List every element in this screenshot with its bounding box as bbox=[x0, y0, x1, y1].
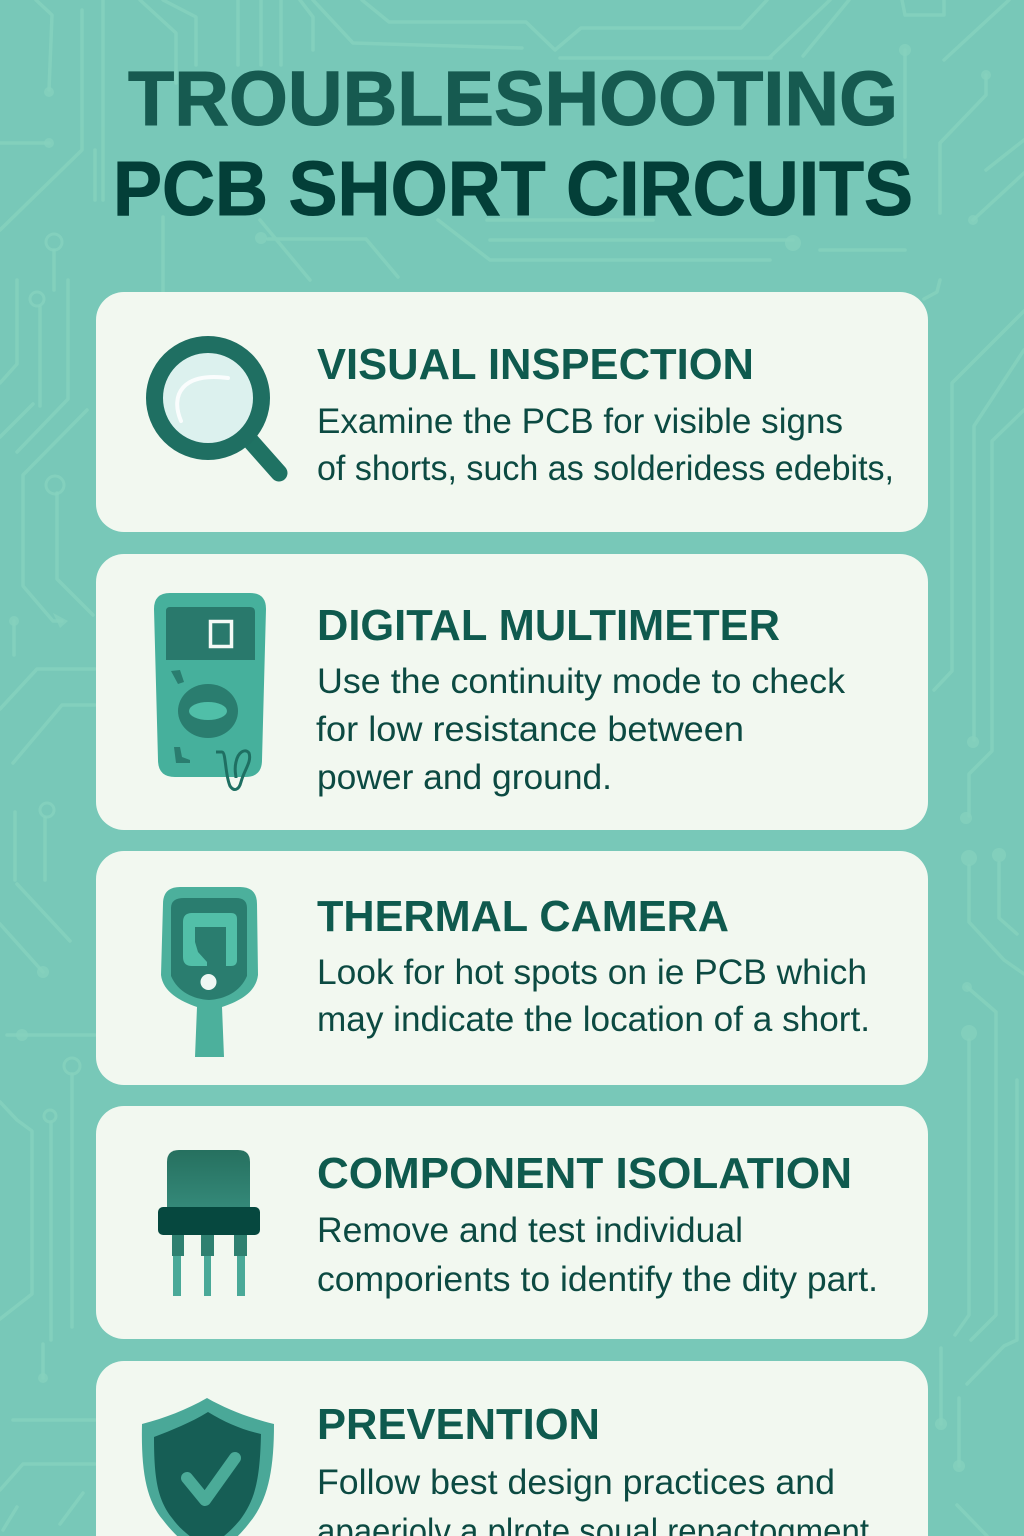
text: visual inspection description: Examine the PCB for visible signs bbox=[317, 402, 843, 441]
text: digital multimeter description bbox=[316, 662, 845, 797]
text: digital multimeter description: for low resistance between bbox=[316, 710, 744, 749]
text: thermal camera description: may indicate the location of a short. bbox=[317, 1000, 870, 1039]
heading: digital multimeter: DIGITAL MULTIMETER bbox=[317, 601, 780, 650]
title: TROUBLESHOOTING bbox=[128, 56, 898, 142]
heading: component isolation: COMPONENT ISOLATION bbox=[317, 1149, 852, 1198]
icon: component bbox=[158, 1150, 260, 1296]
icon: multimeter bbox=[154, 593, 266, 789]
heading: thermal camera: THERMAL CAMERA bbox=[317, 892, 729, 941]
heading: prevention: PREVENTION bbox=[317, 1400, 600, 1449]
icon: shield bbox=[142, 1398, 274, 1536]
trace rings bbox=[30, 234, 80, 1122]
panel: visual inspection bbox=[96, 292, 928, 532]
title bbox=[113, 56, 913, 232]
icon: magnifying glass bbox=[154, 344, 279, 473]
panel: prevention bbox=[96, 1361, 928, 1536]
title: PCB SHORT CIRCUITS bbox=[113, 146, 913, 232]
text: visual inspection description bbox=[317, 402, 894, 488]
panel: digital multimeter bbox=[96, 554, 928, 830]
text: component isolation description: comporients to identify the dity part. bbox=[317, 1260, 878, 1299]
panel: thermal camera bbox=[96, 851, 928, 1085]
text: thermal camera description: Look for hot spots on ie PCB which bbox=[317, 953, 867, 992]
text: prevention description bbox=[317, 1463, 869, 1536]
text: component isolation description bbox=[317, 1211, 878, 1299]
text: thermal camera description bbox=[317, 953, 870, 1039]
text: component isolation description: Remove and test individual bbox=[317, 1211, 743, 1250]
panel: component isolation bbox=[96, 1106, 928, 1339]
text: digital multimeter description: Use the continuity mode to check bbox=[317, 662, 845, 701]
icon: thermal camera bbox=[161, 887, 258, 1057]
text: digital multimeter description: power and ground. bbox=[317, 758, 612, 797]
text: prevention description: Follow best design practices and bbox=[317, 1463, 835, 1502]
text: visual inspection description: of shorts, such as solderidess edebits, bbox=[317, 449, 894, 488]
heading: visual inspection: VISUAL INSPECTION bbox=[317, 340, 754, 389]
